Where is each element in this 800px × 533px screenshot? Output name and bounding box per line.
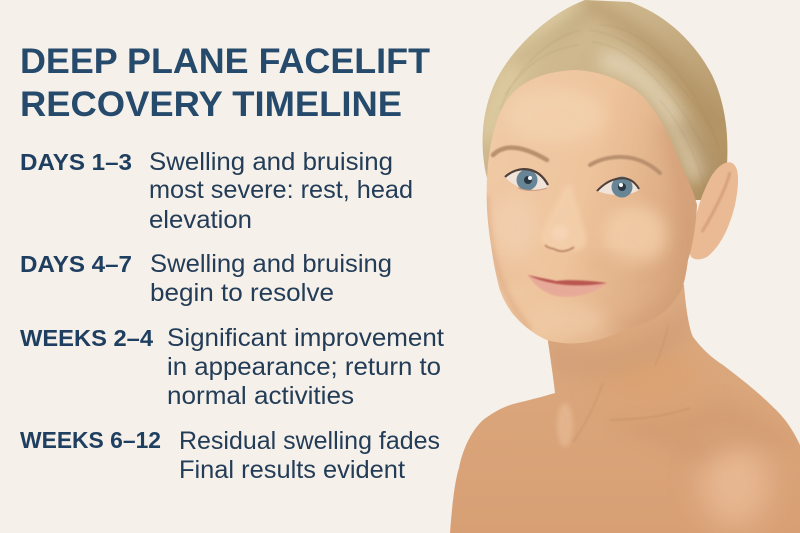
timeline row: weeks 2-4: normal activities	[167, 382, 354, 410]
timeline row: weeks 6-12: Final results evident	[179, 456, 405, 484]
timeline row: weeks 6-12: Residual swelling fades	[179, 427, 440, 455]
timeline row: weeks 2-4	[20, 324, 444, 410]
neck and shoulders	[440, 270, 800, 533]
hair	[475, 0, 735, 205]
right eye	[597, 176, 639, 198]
timeline row: days 1-3: DAYS 1–3	[20, 149, 132, 175]
title: DEEP PLANE FACELIFT	[20, 42, 430, 81]
lips	[528, 275, 607, 297]
timeline row: weeks 2-4: in appearance; return to	[167, 353, 441, 381]
timeline row: days 1-3: elevation	[149, 206, 252, 234]
timeline row: weeks 6-12	[20, 427, 440, 484]
face	[486, 70, 697, 344]
timeline row: days 1-3: Swelling and bruising	[149, 148, 393, 176]
timeline row: days 4-7: DAYS 4–7	[20, 251, 132, 277]
title: RECOVERY TIMELINE	[20, 85, 402, 124]
timeline row: days 4-7: Swelling and bruising	[150, 250, 392, 278]
timeline row: days 1-3	[20, 148, 413, 234]
portrait of woman	[440, 0, 800, 533]
timeline row: days 1-3: most severe: rest, head	[149, 176, 413, 204]
eyebrows	[493, 148, 660, 173]
timeline row: weeks 2-4: WEEKS 2–4	[20, 325, 153, 351]
left eye	[505, 169, 548, 191]
title	[20, 42, 430, 124]
ear	[690, 162, 738, 259]
timeline row: weeks 6-12: WEEKS 6–12	[20, 427, 161, 453]
nose	[541, 185, 586, 251]
timeline row: days 4-7	[20, 250, 392, 307]
timeline row: days 4-7: begin to resolve	[150, 279, 334, 307]
timeline row: weeks 2-4: Significant improvement	[167, 324, 444, 352]
